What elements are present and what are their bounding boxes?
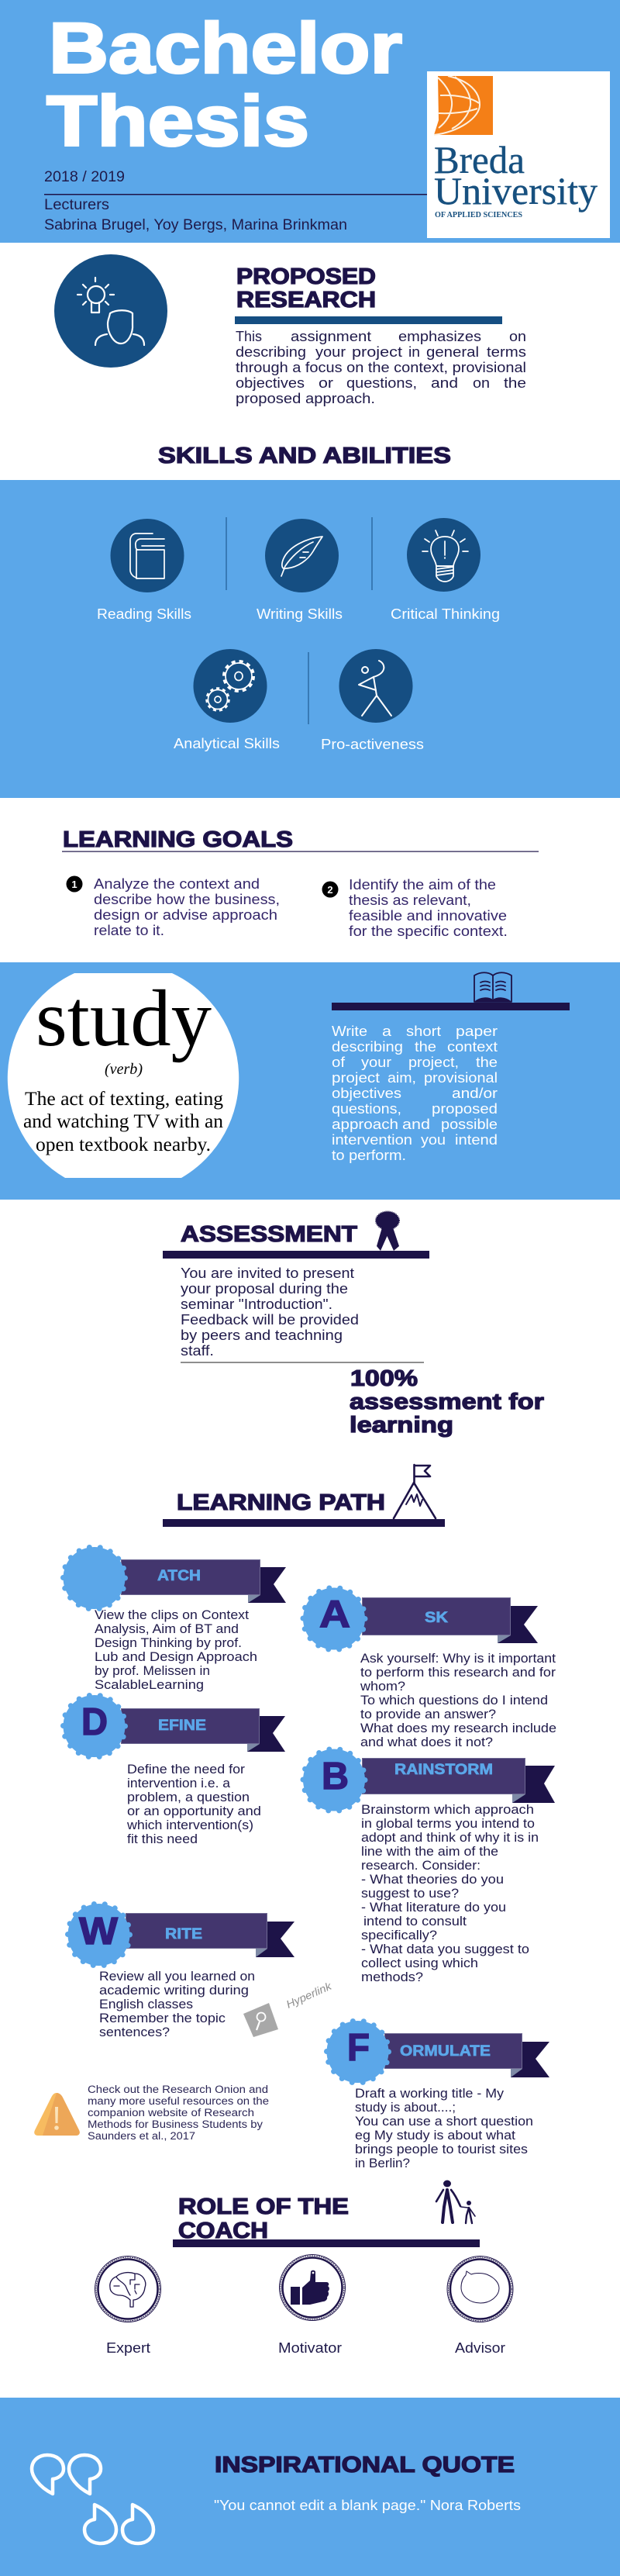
heading: role of the coach: ROLE OF THE (178, 2194, 349, 2219)
role: advisor: Advisor (455, 2340, 505, 2356)
skill: reading: Reading Skills (97, 606, 191, 622)
step: ask: and what does it not? (360, 1735, 493, 1749)
step: brainstorm: - What theories do you (361, 1873, 504, 1887)
text: assignment description: questions, (346, 375, 417, 391)
step: brainstorm: RAINSTORM (394, 1762, 493, 1778)
role: expert: Expert (106, 2340, 150, 2356)
heading: assessment: ASSESSMENT (181, 1222, 357, 1247)
logo: Breda University (427, 71, 610, 238)
step: formulate: You can use a short question (355, 2115, 533, 2129)
text: assignment description: your (315, 344, 346, 360)
step: watch: ATCH (157, 1568, 201, 1584)
heading: role of the coach (178, 2194, 349, 2243)
text: assignment description: in (408, 344, 420, 360)
text: task description: approach (332, 1117, 398, 1132)
step: define: D (81, 1701, 108, 1743)
text: assessment description: your proposal during the (181, 1281, 348, 1297)
text: assessment description: seminar "Introduction". (181, 1297, 332, 1312)
title: Bachelor (49, 9, 402, 88)
skill: writing: Writing Skills (257, 606, 343, 622)
text: task description: you (421, 1132, 446, 1148)
heading: skills and abilities: SKILLS AND ABILITIES (158, 444, 451, 468)
lecturers (44, 197, 347, 233)
logo: Breda University: Breda (434, 138, 525, 181)
lecturers: Sabrina Brugel, Yoy Bergs, Marina Brinkman (44, 217, 347, 233)
step: ask: whom? (360, 1680, 405, 1694)
text: task description: intervention (332, 1132, 412, 1148)
goal 2: Identify the aim of the (349, 876, 496, 893)
heading: role of the coach: COACH (178, 2219, 268, 2243)
text: task description: possible (441, 1117, 498, 1132)
callout: research onion note: Saunders et al., 2017 (88, 2130, 195, 2142)
goal 2 (322, 876, 508, 939)
callout: research onion note: many more useful resources on the (88, 2095, 269, 2107)
step: ask: to provide an answer? (360, 1708, 496, 1721)
skill: reading (97, 519, 191, 622)
text: assessment description: Feedback will be provided (181, 1312, 359, 1328)
text: task description: to perform. (332, 1148, 406, 1163)
callout: 100% assessment for learning (350, 1366, 544, 1438)
text: task description: questions, (332, 1101, 401, 1117)
step: brainstorm: - What data you suggest to (361, 1942, 529, 1956)
step: write: Remember the topic (99, 2011, 226, 2025)
heading: proposed research: RESEARCH (236, 288, 376, 313)
skill: analytical: Analytical Skills (174, 736, 280, 751)
step: brainstorm: Brainstorm which approach (361, 1803, 534, 1817)
step: formulate: F (347, 2027, 370, 2069)
text: assessment description: staff. (181, 1343, 214, 1359)
image: study definition: and watching TV with an (23, 1111, 224, 1132)
title (46, 9, 402, 161)
step: brainstorm: in global terms you intend to (361, 1817, 535, 1831)
icon: hyperlink magnifier (243, 1979, 334, 2037)
logo: Breda University: OF APPLIED SCIENCES (435, 211, 522, 219)
heading: learning path: LEARNING PATH (177, 1490, 385, 1515)
step: formulate: brings people to tourist sites (355, 2143, 528, 2156)
step: formulate: eg My study is about what (355, 2129, 515, 2143)
callout: research onion note (34, 2084, 269, 2142)
step: ask (303, 1588, 556, 1749)
step: ask: SK (425, 1610, 448, 1626)
panel: learning goals (62, 827, 539, 939)
icon: hyperlink magnifier: Hyperlink (284, 1979, 334, 2011)
step: brainstorm: suggest to use? (361, 1887, 459, 1901)
step: brainstorm: B (322, 1756, 349, 1797)
step: watch: by prof. Melissen in (95, 1664, 210, 1678)
step: brainstorm: line with the aim of the (361, 1845, 498, 1859)
text: task description: context (447, 1039, 498, 1055)
text: assignment description (236, 329, 526, 406)
image: study definition: The act of texting, eating (25, 1089, 223, 1110)
step: write: RITE (165, 1926, 202, 1942)
callout: research onion note: Methods for Business Students by (88, 2118, 263, 2130)
callout: research onion note: companion website of Research (88, 2107, 254, 2118)
text: assessment description (181, 1266, 359, 1359)
role: motivator: Motivator (278, 2340, 342, 2356)
step: define: EFINE (158, 1718, 206, 1734)
step: write (68, 1904, 294, 2039)
skill: critical thinking: Critical Thinking (391, 606, 500, 622)
panel: inspirational quote (0, 2398, 620, 2576)
text: task description: the (415, 1039, 436, 1055)
goal 1: Analyze the context and (94, 875, 260, 892)
skill: critical thinking (391, 518, 500, 622)
step: ask: to perform this research and for (360, 1666, 556, 1680)
icon: person with idea (54, 254, 167, 368)
text: task description: intend (455, 1132, 498, 1148)
text: assignment description: describing (236, 344, 306, 360)
step: brainstorm (303, 1749, 555, 1984)
text: task description: of (332, 1055, 346, 1070)
step: brainstorm: intend to consult (363, 1915, 467, 1929)
goal 1 (67, 875, 280, 938)
icon: quotation marks (32, 2455, 153, 2543)
text: task description: project (332, 1070, 380, 1086)
step: define: which intervention(s) (126, 1818, 253, 1832)
academic year: 2018 / 2019 (44, 169, 125, 185)
step: brainstorm: collect using which (361, 1956, 478, 1970)
step: formulate: Draft a working title - My (355, 2087, 505, 2101)
step: define (64, 1695, 285, 1846)
step: ask: What does my research include (360, 1721, 556, 1735)
text: task description: aim, (388, 1070, 416, 1086)
callout: 100% assessment for learning: learning (350, 1413, 453, 1438)
text: task description: short (406, 1024, 441, 1039)
heading: inspirational quote: INSPIRATIONAL QUOTE (215, 2453, 515, 2478)
step: formulate: ORMULATE (400, 2043, 491, 2060)
text: assignment description: emphasizes (398, 329, 481, 344)
panel: header (0, 0, 620, 243)
lecturers: Lecturers (44, 197, 109, 213)
text: assignment description: on (509, 329, 526, 344)
panel: role of the coach (95, 2181, 513, 2356)
icon: mountain with flag (394, 1465, 436, 1518)
step: ask: To which questions do I intend (360, 1694, 548, 1708)
panel: skills and abilities (0, 480, 620, 798)
text: task description: project, (408, 1055, 459, 1070)
step: watch: Analysis, Aim of BT and (95, 1622, 239, 1636)
step: ask: A (319, 1594, 350, 1635)
quote text: "You cannot edit a blank page." Nora Roberts (214, 2498, 521, 2513)
icon: rosette (376, 1211, 399, 1251)
step: formulate: study is about....; (355, 2101, 456, 2115)
goal 2: for the specific context. (349, 923, 508, 939)
step: watch: View the clips on Context (95, 1608, 249, 1622)
text: assignment description: on (473, 375, 490, 391)
text: task description: provisional (424, 1070, 498, 1086)
text: task description: paper (456, 1024, 498, 1039)
text: assignment description: the (504, 375, 526, 391)
heading: learning goals: LEARNING GOALS (63, 827, 293, 852)
icon: adult and child (436, 2181, 475, 2223)
text: task description (332, 1024, 498, 1163)
step: brainstorm: specifically? (361, 1929, 437, 1942)
callout: 100% assessment for learning: assessment for (350, 1390, 544, 1414)
step: watch: Design Thinking by prof. (95, 1636, 242, 1650)
text: assignment description: general (426, 344, 479, 360)
step: brainstorm: methods? (361, 1970, 423, 1984)
goal 2: thesis as relevant, (349, 892, 471, 908)
step: formulate: in Berlin? (355, 2156, 410, 2170)
text: assignment description: proposed approach. (236, 391, 375, 406)
icon: open book (474, 972, 512, 1002)
text: assignment description: This (236, 329, 262, 344)
step: brainstorm: research. Consider: (361, 1859, 480, 1873)
step: define: problem, a question (127, 1790, 250, 1804)
goal 2: feasible and innovative (349, 907, 507, 924)
step: define: or an opportunity and (127, 1804, 261, 1818)
text: assessment description: You are invited to present (181, 1266, 354, 1281)
step: brainstorm: adopt and think of why it is in (361, 1831, 539, 1845)
text: assignment description: terms (487, 344, 526, 360)
goal 2: 2 (327, 884, 333, 896)
text: assignment description: objectives (236, 375, 305, 391)
step: define: Define the need for (127, 1763, 246, 1777)
role: expert (95, 2257, 161, 2356)
step: watch: Lub and Design Approach (95, 1650, 257, 1664)
text: task description: a (382, 1024, 392, 1039)
panel: assessment (163, 1211, 544, 1438)
logo: Breda University: University (434, 169, 598, 212)
text: assignment description: project (352, 344, 402, 360)
text: assessment description: by peers and teachning (181, 1328, 343, 1343)
step: brainstorm: - What literature do you (361, 1901, 506, 1915)
heading: learning path (163, 1465, 445, 1527)
step: define: intervention i.e. a (127, 1777, 231, 1790)
text: task description: objectives (332, 1086, 401, 1101)
goal 1: relate to it. (94, 922, 164, 938)
goal 1: describe how the business, (94, 891, 280, 907)
text: assignment description: and (431, 375, 458, 391)
step: define: fit this need (127, 1832, 198, 1846)
image: study definition: open textbook nearby. (36, 1134, 211, 1155)
text: task description: and (402, 1117, 430, 1132)
goal 1: design or advise approach (94, 906, 277, 923)
text: task description: describing (332, 1039, 403, 1055)
skill: pro-activeness (321, 649, 424, 752)
text: assignment description: or (319, 375, 333, 391)
panel: learning path steps (34, 1547, 556, 2170)
image: study definition: study (36, 974, 212, 1063)
step: write: English classes (99, 1998, 193, 2011)
goal 1: 1 (71, 879, 78, 890)
callout: research onion note: Check out the Research Onion and (88, 2084, 268, 2095)
text: task description: and/or (452, 1086, 498, 1101)
image: study definition (8, 973, 239, 1178)
title: Thesis (46, 82, 309, 161)
heading: proposed research (236, 264, 376, 313)
role: advisor (447, 2257, 513, 2356)
image: study definition: (verb) (105, 1061, 143, 1078)
skill: pro-activeness: Pro-activeness (321, 737, 424, 752)
skill: analytical (174, 649, 280, 751)
callout: 100% assessment for learning: 100% (350, 1366, 418, 1391)
step: write: W (79, 1911, 119, 1953)
text: assignment description: assignment (291, 329, 371, 344)
heading: proposed research: PROPOSED (236, 264, 376, 289)
step: write: academic writing during (99, 1984, 249, 1998)
step: formulate (327, 2021, 549, 2170)
role: motivator (278, 2255, 346, 2356)
text: task description: your (361, 1055, 391, 1070)
text: task description: Write (332, 1024, 367, 1039)
step: write: sentences? (99, 2025, 170, 2039)
step: ask: Ask yourself: Why is it important (360, 1652, 556, 1666)
panel: proposed research (54, 254, 526, 406)
step: watch: ScalableLearning (95, 1678, 204, 1692)
text: task description: the (476, 1055, 498, 1070)
text: assignment description: through a focus on the context, provisional (236, 360, 526, 375)
step: write: Review all you learned on (99, 1970, 255, 1984)
skill: writing (257, 519, 343, 622)
step: watch (64, 1547, 286, 1692)
panel: study definition and task (0, 962, 620, 1200)
text: task description: proposed (432, 1101, 498, 1117)
